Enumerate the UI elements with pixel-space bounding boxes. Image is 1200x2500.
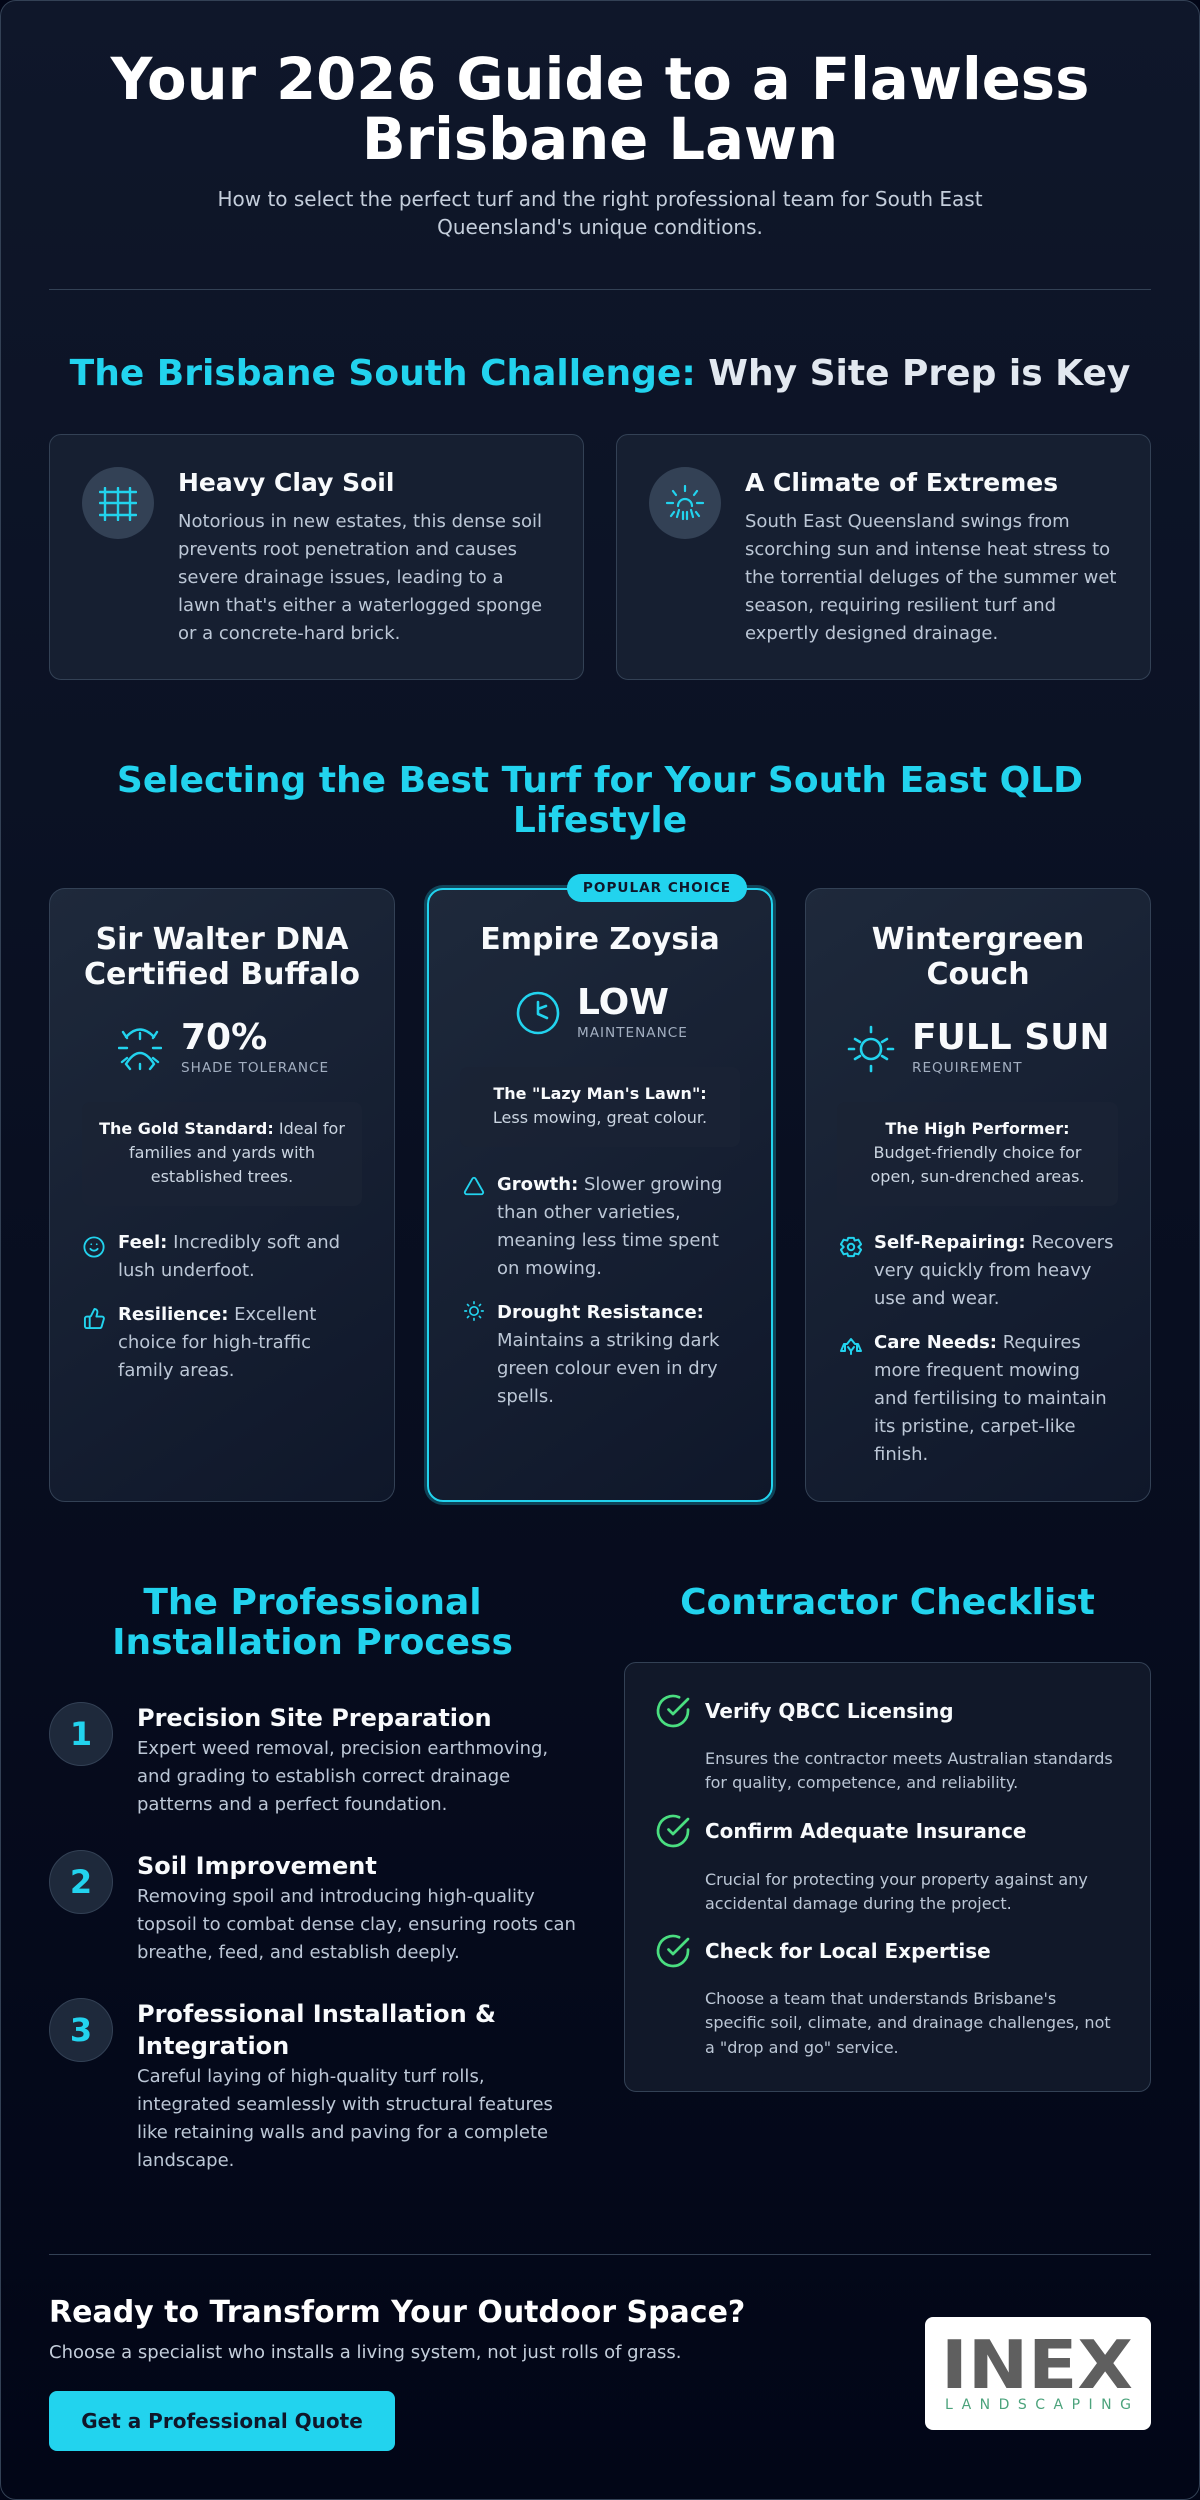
stat label: MAINTENANCE xyxy=(577,1025,688,1041)
turf name xyxy=(872,922,1084,992)
turf name: Wintergreen xyxy=(872,922,1084,957)
turf name: Couch xyxy=(926,957,1030,992)
feature: care needs: its pristine, carpet-like xyxy=(874,1416,1076,1437)
highlight text: Budget-friendly choice for xyxy=(873,1143,1082,1162)
feature: self-repairing: Self-Repairing: Recovers xyxy=(874,1232,1113,1253)
stat label: SHADE TOLERANCE xyxy=(181,1060,329,1076)
stat label: REQUIREMENT xyxy=(912,1060,1023,1076)
icon: shade xyxy=(118,1028,162,1070)
step title: Professional Installation & xyxy=(137,2000,496,2028)
subtitle: How to select the perfect turf and the right professional team for South East xyxy=(217,187,983,211)
badge: popular choice: POPULAR CHOICE xyxy=(583,880,731,896)
turf name: Empire Zoysia xyxy=(480,922,720,957)
card text: South East Queensland swings from xyxy=(745,511,1070,532)
stat value: 70% xyxy=(181,1017,267,1058)
highlight text: The Gold Standard: Ideal for xyxy=(99,1119,345,1138)
highlight text xyxy=(99,1119,345,1186)
panel: Sir Walter DNA Certified Buffalo xyxy=(49,888,395,1502)
step title: Integration xyxy=(137,2032,289,2060)
check title: Verify QBCC Licensing xyxy=(705,1699,954,1723)
title: Brisbane Lawn xyxy=(362,106,838,173)
step text: like retaining walls and paving for a complete xyxy=(137,2122,548,2143)
highlight box xyxy=(460,1067,740,1147)
feature: self-repairing: use and wear. xyxy=(874,1288,999,1309)
panel: contractor checklist xyxy=(624,1662,1151,2092)
step text: Expert weed removal, precision earthmoving, xyxy=(137,1738,548,1759)
heading: selecting turf xyxy=(117,760,1083,841)
feature: resilience: family areas. xyxy=(118,1360,235,1381)
card text: prevents root penetration and causes xyxy=(178,539,517,560)
step title: Soil Improvement xyxy=(137,1852,377,1880)
check text: a "drop and go" service. xyxy=(705,2038,899,2057)
feature: resilience: Resilience: Excellent xyxy=(118,1304,316,1325)
heading: installation process: The Professional xyxy=(143,1582,482,1623)
logo: INEX Landscaping: LANDSCAPING xyxy=(945,2397,1131,2413)
heading: installation process: Installation Process xyxy=(112,1622,513,1663)
feature: care needs: finish. xyxy=(874,1444,928,1465)
highlight text xyxy=(493,1084,707,1127)
check text: Ensures the contractor meets Australian standards xyxy=(705,1749,1113,1768)
icon: thumbs up xyxy=(84,1308,105,1329)
card heading: Heavy Clay Soil xyxy=(178,468,394,497)
icon: small sun xyxy=(464,1301,484,1321)
highlight text: The High Performer: xyxy=(885,1119,1070,1138)
feature: growth: on mowing. xyxy=(497,1258,602,1279)
feature: growth: than other varieties, xyxy=(497,1202,681,1223)
step text: landscape. xyxy=(137,2150,234,2171)
highlight text xyxy=(870,1119,1084,1186)
heading: selecting turf: Lifestyle xyxy=(513,800,687,841)
panel: Empire Zoysia xyxy=(427,888,773,1502)
turf name xyxy=(84,922,360,992)
card text: Notorious in new estates, this dense soil xyxy=(178,511,542,532)
check text: for quality, competence, and reliability. xyxy=(705,1773,1018,1792)
icon: soil grid xyxy=(82,467,154,539)
feature: care needs: more frequent mowing xyxy=(874,1360,1080,1381)
highlight text: established trees. xyxy=(151,1167,293,1186)
card text: scorching sun and intense heat stress to xyxy=(745,539,1110,560)
highlight box xyxy=(82,1102,362,1206)
process step 2 xyxy=(49,1850,576,1963)
check text xyxy=(705,1989,1111,2057)
step text: Removing spoil and introducing high-quality xyxy=(137,1886,535,1907)
check text: accidental damage during the project. xyxy=(705,1894,1012,1913)
feature: drought resistance: Maintains a striking dark xyxy=(497,1330,719,1351)
step number xyxy=(49,1998,113,2062)
process step 3 xyxy=(49,1998,553,2171)
card text: the torrential deluges of the summer wet xyxy=(745,567,1116,588)
check text: Choose a team that understands Brisbane's xyxy=(705,1989,1056,2008)
badge: popular choice xyxy=(567,874,747,902)
check text xyxy=(705,1870,1088,1913)
feature: growth: Growth: Slower growing xyxy=(497,1174,722,1195)
icon: check xyxy=(656,1694,690,1728)
step text xyxy=(137,2066,553,2171)
check text: specific soil, climate, and drainage challenges, not xyxy=(705,2013,1111,2032)
step text: patterns and a perfect foundation. xyxy=(137,1794,447,1815)
feature: drought resistance xyxy=(497,1302,720,1407)
button: get a quote xyxy=(49,2391,395,2451)
feature: care needs xyxy=(874,1332,1107,1465)
logo: INEX Landscaping xyxy=(925,2317,1151,2430)
highlight box xyxy=(837,1102,1118,1206)
turf name: Sir Walter DNA xyxy=(96,922,348,957)
icon: check xyxy=(656,1934,690,1968)
step text xyxy=(137,1738,548,1815)
step text xyxy=(137,1886,576,1963)
feature: drought resistance: Drought Resistance: xyxy=(497,1302,704,1323)
feature: drought resistance: spells. xyxy=(497,1386,554,1407)
step title xyxy=(137,2000,496,2060)
card text xyxy=(178,511,542,644)
title: Your 2026 Guide to a Flawless xyxy=(111,46,1089,113)
check title: Confirm Adequate Insurance xyxy=(705,1819,1026,1843)
highlight text: Less mowing, great colour. xyxy=(493,1108,707,1127)
panel: climate of extremes xyxy=(616,434,1151,680)
feature: self-repairing: very quickly from heavy xyxy=(874,1260,1091,1281)
subtitle: Queensland's unique conditions. xyxy=(437,215,763,239)
feature: feel xyxy=(118,1232,340,1281)
card text: severe drainage issues, leading to a xyxy=(178,567,503,588)
highlight text: The "Lazy Man's Lawn": xyxy=(493,1084,707,1103)
icon: sun xyxy=(848,1026,894,1072)
heading: installation process xyxy=(112,1582,513,1663)
feature: growth xyxy=(497,1174,722,1279)
icon: sun and rain xyxy=(649,467,721,539)
card text: expertly designed drainage. xyxy=(745,623,998,644)
footer heading: Ready to Transform Your Outdoor Space? xyxy=(49,2295,745,2330)
step number xyxy=(49,1850,113,1914)
panel: Wintergreen Couch xyxy=(805,888,1151,1502)
card text xyxy=(745,511,1116,644)
step number: 1 xyxy=(70,1715,92,1753)
step number xyxy=(49,1702,113,1766)
feature: self-repairing xyxy=(874,1232,1113,1309)
step text: breathe, feed, and establish deeply. xyxy=(137,1942,460,1963)
footer text: Choose a specialist who installs a living system, not just rolls of grass. xyxy=(49,2342,682,2363)
process step 1 xyxy=(49,1702,548,1815)
card text: season, requiring resilient turf and xyxy=(745,595,1056,616)
step text: integrated seamlessly with structural features xyxy=(137,2094,553,2115)
feature: resilience xyxy=(118,1304,316,1381)
icon: check xyxy=(656,1814,690,1848)
title xyxy=(110,46,1089,173)
subtitle xyxy=(217,187,983,239)
feature: resilience: choice for high-traffic xyxy=(118,1332,311,1353)
check text: Crucial for protecting your property against any xyxy=(705,1870,1088,1889)
button: get a quote: Get a Professional Quote xyxy=(81,2409,363,2433)
feature: drought resistance: green colour even in dry xyxy=(497,1358,718,1379)
heading: contractor checklist: Contractor Checklist xyxy=(680,1582,1095,1623)
turf name: Certified Buffalo xyxy=(84,957,360,992)
feature: growth: meaning less time spent xyxy=(497,1230,719,1251)
panel: heavy clay soil xyxy=(49,434,584,680)
step number: 2 xyxy=(70,1863,92,1901)
feature: care needs: Care Needs: Requires xyxy=(874,1332,1081,1353)
step text: topsoil to combat dense clay, ensuring roots can xyxy=(137,1914,576,1935)
check title: Check for Local Expertise xyxy=(705,1939,991,1963)
heading: selecting turf: Selecting the Best Turf for Your South East QLD xyxy=(117,760,1083,801)
highlight text: families and yards with xyxy=(129,1143,315,1162)
step title: Precision Site Preparation xyxy=(137,1704,492,1732)
feature: feel: lush underfoot. xyxy=(118,1260,255,1281)
step number: 3 xyxy=(70,2011,92,2049)
icon: self repair xyxy=(840,1236,862,1258)
heading: Brisbane South Challenge: The Brisbane South Challenge: Why Site Prep is Key xyxy=(70,353,1130,394)
icon: clock xyxy=(516,992,560,1034)
card text: lawn that's either a waterlogged sponge xyxy=(178,595,542,616)
card text: or a concrete-hard brick. xyxy=(178,623,400,644)
icon: care xyxy=(840,1338,862,1355)
feature: care needs: and fertilising to maintain xyxy=(874,1388,1107,1409)
step text: and grading to establish correct drainage xyxy=(137,1766,510,1787)
highlight text: open, sun-drenched areas. xyxy=(870,1167,1084,1186)
feature: feel: Feel: Incredibly soft and xyxy=(118,1232,340,1253)
logo: INEX Landscaping: INEX xyxy=(941,2326,1133,2404)
stat value: LOW xyxy=(577,982,669,1023)
step text: Careful laying of high-quality turf rolls, xyxy=(137,2066,485,2087)
check text xyxy=(705,1749,1113,1792)
icon: smile xyxy=(83,1236,104,1258)
icon: triangle xyxy=(464,1176,484,1196)
stat value: FULL SUN xyxy=(912,1017,1110,1058)
card heading: A Climate of Extremes xyxy=(745,468,1058,497)
